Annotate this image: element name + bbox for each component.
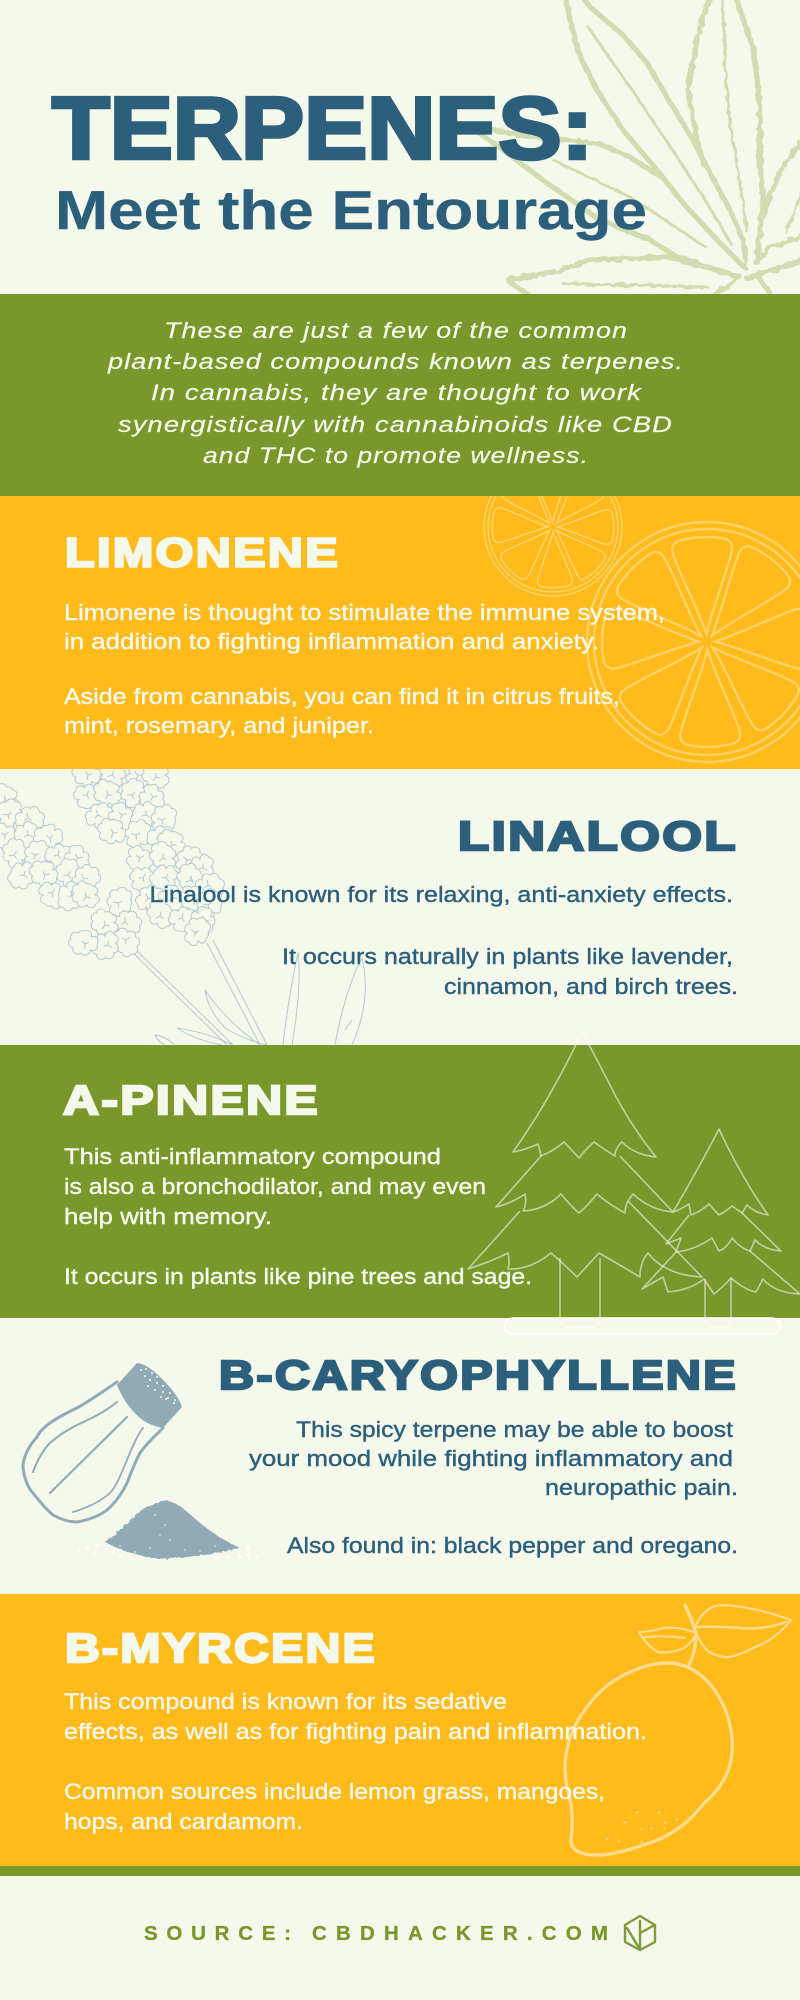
b-caryophyllene text: This spicy terpene may be able to boost <box>296 1417 734 1442</box>
limonene text: Limonene is thought to stimulate the immune system, <box>64 600 665 625</box>
b-myrcene text <box>64 1689 647 1834</box>
intro text: and THC to promote wellness. <box>203 443 589 468</box>
icon: logo <box>625 1916 655 1950</box>
b-caryophyllene text <box>249 1417 738 1558</box>
a-pinene text: help with memory. <box>64 1204 272 1229</box>
a-pinene text: It occurs in plants like pine trees and sage. <box>64 1264 532 1289</box>
panel: introduction <box>0 294 800 496</box>
icon: pepper shaker <box>23 1363 182 1522</box>
heading: linalool: LINALOOL <box>458 813 738 859</box>
panel: b-myrcene <box>0 1594 800 1866</box>
limonene text: Aside from cannabis, you can find it in citrus fruits, <box>64 684 620 709</box>
icon: lavender sprigs <box>0 755 365 1045</box>
panel: linalool <box>0 769 736 1045</box>
heading: b-caryophyllene: B-CARYOPHYLLENE <box>219 1352 738 1398</box>
footer: source <box>144 1916 655 1950</box>
title: TERPENES: <box>52 78 593 178</box>
source text <box>144 1922 608 1945</box>
limonene text: in addition to fighting inflammation and anxiety. <box>64 629 599 654</box>
intro text: synergistically with cannabinoids like CBD <box>118 412 673 437</box>
linalool text: cinnamon, and birch trees. <box>444 974 738 999</box>
panel: a-pinene <box>0 1032 800 1334</box>
heading: limonene: LIMONENE <box>65 530 340 576</box>
intro text: plant-based compounds known as terpenes. <box>107 349 684 374</box>
a-pinene text: is also a bronchodilator, and may even <box>64 1174 486 1199</box>
linalool text <box>150 882 738 999</box>
linalool text: Linalool is known for its relaxing, anti-anxiety effects. <box>150 882 733 907</box>
b-myrcene text: This compound is known for its sedative <box>64 1689 507 1714</box>
intro text <box>107 318 684 468</box>
source text: SOURCE: <box>144 1922 291 1945</box>
intro text: These are just a few of the common <box>164 318 628 343</box>
a-pinene text: This anti-inflammatory compound <box>64 1144 441 1169</box>
icon: citrus slices <box>483 496 800 764</box>
b-caryophyllene text: neuropathic pain. <box>545 1475 738 1500</box>
heading: a-pinene: A-PINENE <box>63 1077 320 1123</box>
subtitle: Meet the Entourage <box>55 179 647 241</box>
linalool text: It occurs naturally in plants like lavender, <box>282 944 733 969</box>
b-caryophyllene text: your mood while fighting inflammatory and <box>249 1446 733 1471</box>
limonene text <box>64 600 665 738</box>
panel: b-caryophyllene <box>0 1318 800 1594</box>
b-myrcene text: effects, as well as for fighting pain and inflammation. <box>64 1719 647 1744</box>
icon: ground pepper pile <box>77 1500 259 1560</box>
b-myrcene text: Common sources include lemon grass, mangoes, <box>64 1779 605 1804</box>
b-caryophyllene text: Also found in: black pepper and oregano. <box>287 1533 738 1558</box>
icon: pine trees <box>468 1032 800 1334</box>
icon: cannabis leaf <box>472 0 800 296</box>
green divider bar <box>0 1866 800 1876</box>
panel: header <box>0 0 800 296</box>
b-myrcene text: hops, and cardamom. <box>64 1809 303 1834</box>
heading: b-myrcene: B-MYRCENE <box>65 1625 377 1671</box>
limonene text: mint, rosemary, and juniper. <box>64 713 374 738</box>
icon: mango <box>565 1605 791 1855</box>
a-pinene text <box>64 1144 532 1289</box>
intro text: In cannabis, they are thought to work <box>151 380 642 405</box>
panel: limonene <box>0 496 800 769</box>
source text: CBDHACKER.COM <box>312 1922 608 1945</box>
